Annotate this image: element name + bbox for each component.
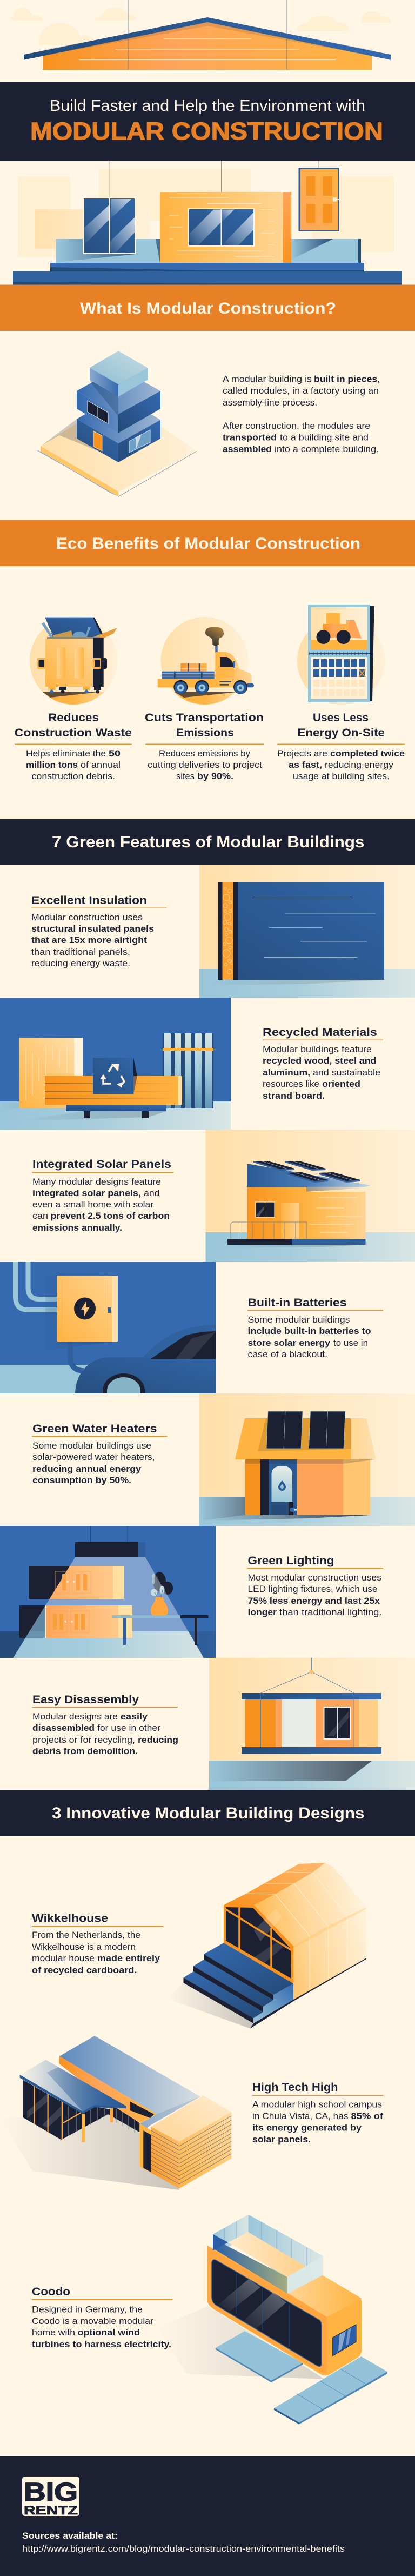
illustration: hanging module: [209, 1658, 415, 1790]
section heading: seven green features: [0, 819, 415, 865]
roof shadow: [43, 19, 372, 56]
feature text: high tech high: A modular high school campus: [252, 2100, 382, 2110]
feature text: excellent insulation: Excellent Insulation: [31, 894, 147, 907]
feature text: built-in batteries: Built-in Batteries: [247, 1297, 347, 1309]
feature text: integrated solar panels: [32, 1158, 173, 1233]
feature text: easy disassembly: Easy Disassembly: [32, 1694, 139, 1706]
what is modular construction text: built in pieces,: [314, 375, 380, 384]
title line two: MODULAR CONSTRUCTION: [30, 117, 383, 145]
section heading: seven green features: 7 Green Features of Modular Buildings: [52, 833, 364, 851]
benefit: uses less energy on-site: Energy On-Site: [297, 727, 385, 739]
wing walls: [23, 2080, 61, 2140]
benefit: reduces construction waste: million tons: [26, 760, 78, 770]
interior floor: [228, 2232, 306, 2277]
feature text: coodo: Designed in Germany, the: [32, 2305, 143, 2314]
feature text: green lighting: LED lighting fixtures, which use: [247, 1584, 377, 1594]
module wall: [160, 192, 283, 263]
benefit: cuts transportation emissions: cutting deliveries to project: [148, 760, 263, 770]
logo: BigRentz: BIG: [24, 2478, 78, 2507]
illustration: coodo movable home: [157, 2215, 387, 2425]
panels: [253, 1161, 360, 1183]
background blocks: [18, 176, 70, 257]
wood panel: [19, 1038, 83, 1108]
logo: BigRentz: [22, 2477, 79, 2517]
water tank: [271, 1466, 292, 1502]
clouds: [11, 8, 391, 45]
steps: [184, 1943, 293, 2023]
sources: Sources available at:: [22, 2531, 118, 2541]
feature text: built-in batteries: case of a blackout.: [247, 1350, 327, 1359]
benefit: uses less energy on-site: completed twice: [330, 749, 405, 759]
isometric stacked module tower: [36, 351, 197, 497]
feature text: easy disassembly: debris from demolition.: [32, 1747, 138, 1756]
what is modular construction text: assembled: [223, 444, 272, 454]
benefit: reduces construction waste: Helps eliminate the: [26, 749, 106, 759]
feature text: high tech high: [252, 2081, 384, 2145]
feature text: easy disassembly: disassembled: [32, 1723, 95, 1733]
feature text: recycled materials: resources like: [263, 1079, 319, 1089]
feature text: coodo: [32, 2286, 172, 2349]
beams: [242, 1693, 381, 1699]
conduit pipes: [15, 1262, 57, 1310]
charge cable: [70, 1342, 84, 1371]
roof cap: [24, 17, 391, 60]
insulation bubbles: [223, 887, 232, 974]
feature text: integrated solar panels: prevent 2.5 tons of carbon: [51, 1211, 170, 1221]
section heading: three innovative designs: 3 Innovative Modular Building Designs: [52, 1804, 364, 1822]
illustration: insulated wall panel: [199, 865, 415, 998]
footer: [0, 2456, 415, 2576]
plant stems and pale leaves: [151, 1574, 164, 1598]
feature text: green lighting: Green Lighting: [247, 1555, 334, 1567]
module walls: [245, 1699, 276, 1747]
icon: dumpster: [30, 617, 117, 705]
base and legs: [66, 1105, 166, 1111]
feature text: wikkelhouse: made entirely: [97, 1954, 160, 1963]
feature text: excellent insulation: than traditional panels,: [31, 947, 130, 957]
what is modular construction text: called modules, in a factory using an: [223, 386, 379, 396]
benefit: uses less energy on-site: Projects are: [277, 749, 327, 759]
feature text: integrated solar panels: and: [144, 1189, 160, 1198]
roof: [235, 1418, 376, 1459]
feature text: coodo: optional wind: [78, 2328, 140, 2338]
benefit: reduces construction waste: of annual: [81, 760, 121, 770]
icon: truck with smoke: [158, 617, 254, 705]
deck: [227, 1239, 292, 1245]
upper glass walls: [213, 2215, 249, 2256]
what is modular construction text: After construction, the modules are: [223, 421, 370, 431]
feature text: easy disassembly: projects or for recycling,: [32, 1735, 135, 1745]
benefit: reduces construction waste: Construction Waste: [14, 727, 132, 739]
feature text: built-in batteries: store solar energy: [247, 1338, 330, 1348]
light blue wall: [56, 239, 361, 263]
recycling sign: [93, 1058, 137, 1094]
feature text: wikkelhouse: Wikkelhouse: [32, 1913, 108, 1925]
title banner: [0, 82, 415, 161]
benefit: cuts transportation emissions: Emissions: [176, 727, 234, 739]
title line one: Build Faster and Help the Environment with: [50, 97, 365, 115]
feature text: green water heaters: reducing annual energy: [32, 1464, 141, 1474]
crane cables: [128, 0, 129, 70]
benefit: uses less energy on-site: reducing energy: [325, 760, 394, 770]
railing: [231, 1222, 306, 1239]
illustration: battery and electric car: [0, 1262, 216, 1393]
illustration: high tech high campus: [0, 2036, 231, 2190]
section heading: three innovative designs: [0, 1790, 415, 1836]
illustration: wikkelhouse: [166, 1863, 366, 2029]
feature text: integrated solar panels: Many modular designs feature: [32, 1177, 161, 1187]
benefit: reduces construction waste: 50: [109, 749, 121, 759]
what is modular construction text: to a building site and: [280, 433, 369, 442]
lower cabinet lit: [45, 1605, 132, 1638]
roof: [247, 1164, 371, 1187]
feature text: coodo: Coodo is a movable modular: [32, 2316, 154, 2326]
feature text: high tech high: High Tech High: [252, 2081, 338, 2094]
lower module: [77, 395, 160, 443]
feature text: wikkelhouse: of recycled cardboard.: [32, 1966, 137, 1975]
illustration: recycled materials: [0, 998, 231, 1130]
feature text: recycled materials: Recycled Materials: [263, 1026, 377, 1039]
section heading: eco benefits: [0, 520, 415, 566]
main window: [212, 2260, 322, 2366]
benefit: cuts transportation emissions: Reduces emissions by: [159, 749, 251, 759]
dark cabinet silhouettes: [19, 1566, 124, 1638]
feature text: high tech high: solar panels.: [252, 2135, 311, 2145]
vase: [151, 1597, 168, 1615]
feature text: excellent insulation: Modular construction uses: [31, 913, 143, 922]
feature text: recycled materials: [263, 1026, 383, 1101]
battery box: [57, 1276, 118, 1342]
pipes: [163, 1033, 213, 1108]
feature text: green water heaters: consumption by 50%.: [32, 1476, 131, 1485]
benefit: reduces construction waste: construction debris.: [31, 772, 115, 781]
feature text: excellent insulation: [31, 894, 166, 968]
feature text: built-in batteries: to use in: [333, 1338, 368, 1348]
feature text: green water heaters: Some modular buildings use: [32, 1441, 151, 1451]
benefit: cuts transportation emissions: sites: [176, 772, 195, 781]
lit floor: [13, 1606, 204, 1658]
right wall: [306, 1192, 365, 1239]
illustration: solar panel house: [205, 1130, 415, 1262]
feature text: easy disassembly: [32, 1694, 178, 1756]
what is modular construction text: A modular building is: [223, 375, 312, 384]
cube: [139, 2123, 151, 2173]
corridor wall: [108, 2108, 139, 2132]
feature text: green lighting: longer: [247, 1608, 277, 1617]
hero roof illustration: [11, 0, 391, 70]
main roof: [59, 2036, 200, 2129]
footer: http://www.bigrentz.com/blog/modular-construction-environmental-benefits: [22, 2544, 345, 2554]
illustration: solar water heater house: [199, 1393, 415, 1526]
benefit: cuts transportation emissions: by 90%.: [197, 772, 233, 781]
feature text: integrated solar panels: even a small home with solar: [32, 1200, 154, 1210]
feature text: coodo: turbines to harness electricity.: [32, 2340, 171, 2349]
feature text: wikkelhouse: modular house: [32, 1954, 95, 1963]
feature text: easy disassembly: Modular designs are: [32, 1712, 118, 1722]
door: [93, 431, 102, 451]
hanging window: [83, 197, 136, 254]
roof gable wall: [43, 22, 372, 70]
side wall: [254, 1863, 366, 2000]
feature text: green water heaters: Green Water Heaters: [32, 1423, 157, 1435]
orange fascia: [59, 2056, 157, 2123]
feature text: green water heaters: solar-powered water heaters,: [32, 1452, 155, 1462]
front glass with frame: [224, 1905, 293, 1983]
front lower glass: [213, 2239, 287, 2294]
benefit: cuts transportation emissions: [145, 712, 264, 781]
feature text: easy disassembly: reducing: [138, 1735, 178, 1745]
feature text: green water heaters: [32, 1423, 168, 1485]
feature text: green lighting: than traditional lighting.: [279, 1608, 381, 1617]
feature text: recycled materials: oriented: [322, 1079, 360, 1089]
feature text: easy disassembly: easily: [121, 1712, 148, 1722]
canopy posts: [82, 2114, 85, 2142]
benefit: uses less energy on-site: as fast,: [289, 760, 322, 770]
section heading: what is modular construction: What Is Modular Construction?: [80, 300, 336, 317]
feature text: wikkelhouse: Wikkelhouse is a modern: [32, 1942, 136, 1952]
feature text: integrated solar panels: can: [32, 1211, 48, 1221]
upper module: [77, 368, 160, 414]
feature text: wikkelhouse: [32, 1913, 163, 1975]
top module: [90, 380, 118, 416]
base plate: [41, 397, 197, 492]
feature text: wikkelhouse: From the Netherlands, the: [32, 1930, 140, 1940]
benefit: uses less energy on-site: usage at building sites.: [293, 772, 390, 781]
benefit: reduces construction waste: [14, 712, 132, 781]
feature text: green lighting: [247, 1555, 383, 1617]
front wall: [247, 1187, 306, 1239]
feature text: easy disassembly: for use in other: [97, 1723, 161, 1733]
hanging door: [298, 168, 339, 231]
lamp: [75, 1542, 138, 1557]
feature text: recycled materials: recycled wood, steel and: [263, 1056, 376, 1066]
orange board stack: [45, 1076, 182, 1105]
feature text: recycled materials: and sustainable: [313, 1068, 380, 1078]
feature text: built-in batteries: [247, 1297, 383, 1359]
benefit: uses less energy on-site: [277, 712, 405, 781]
module window: [188, 208, 255, 247]
table: [112, 1615, 209, 1645]
window lower: [129, 430, 150, 453]
feature text: integrated solar panels: emissions annually.: [32, 1223, 122, 1233]
benefit: uses less energy on-site: Uses Less: [313, 712, 369, 724]
window and door: [256, 1202, 275, 1217]
feature text: recycled materials: aluminum,: [263, 1068, 310, 1078]
what is modular construction text: transported: [223, 433, 277, 442]
feature text: high tech high: in Chula Vista, CA, has: [252, 2112, 348, 2121]
what is modular construction text: [223, 375, 380, 454]
feature text: high tech high: 85% of: [351, 2112, 384, 2121]
orange shell: [207, 2244, 362, 2375]
hero module assembly illustration: [13, 161, 402, 284]
car: [75, 1325, 216, 1393]
feature text: integrated solar panels: Integrated Solar Panels: [32, 1158, 171, 1171]
solar panels: [266, 1411, 345, 1449]
feature text: excellent insulation: structural insulated panels: [31, 924, 154, 934]
crane rigging: [260, 1658, 354, 1747]
logo: BigRentz: RENTZ: [24, 2504, 78, 2517]
cables: [109, 161, 110, 197]
light cone: [13, 1557, 204, 1658]
feature text: coodo: Coodo: [32, 2286, 70, 2298]
house walls: [245, 1459, 260, 1515]
plant shadow leaves: [153, 1572, 173, 1595]
feature text: built-in batteries: include built-in batteries to: [247, 1326, 371, 1336]
feature text: excellent insulation: that are 15x more airtight: [31, 935, 148, 945]
wing roof: [20, 2060, 126, 2112]
benefit: cuts transportation emissions: Cuts Transportation: [145, 712, 264, 724]
window: [324, 1707, 350, 1739]
feature text: green lighting: Most modular construction uses: [247, 1573, 381, 1583]
illustration: green led lighting: [0, 1526, 216, 1658]
feature text: green lighting: 75% less energy and last 25x: [247, 1596, 380, 1606]
what is modular construction text: into a complete building.: [275, 444, 379, 454]
base shadow: [36, 450, 118, 496]
what is modular construction text: assembly-line process.: [223, 398, 317, 408]
feature text: high tech high: its energy generated by: [252, 2123, 362, 2133]
section heading: what is modular construction: [0, 284, 415, 331]
benefit: reduces construction waste: Reduces: [48, 712, 99, 724]
feature text: coodo: home with: [32, 2328, 75, 2338]
feature text: integrated solar panels: integrated solar panels,: [32, 1189, 141, 1198]
feature text: excellent insulation: reducing energy waste.: [31, 959, 130, 968]
upper cabinet lit: [50, 1566, 124, 1599]
section heading: eco benefits: Eco Benefits of Modular Construction: [56, 535, 360, 553]
side window: [333, 2325, 356, 2356]
feature text: recycled materials: strand board.: [263, 1091, 325, 1101]
feature text: built-in batteries: Some modular buildings: [247, 1315, 350, 1325]
window upper: [88, 401, 108, 423]
feature text: recycled materials: Modular buildings feature: [263, 1045, 372, 1054]
roof edge strip: [224, 1863, 325, 1905]
paving: [216, 2331, 387, 2425]
foundation steps: [50, 263, 364, 271]
icon: construction calendar: [297, 605, 385, 705]
